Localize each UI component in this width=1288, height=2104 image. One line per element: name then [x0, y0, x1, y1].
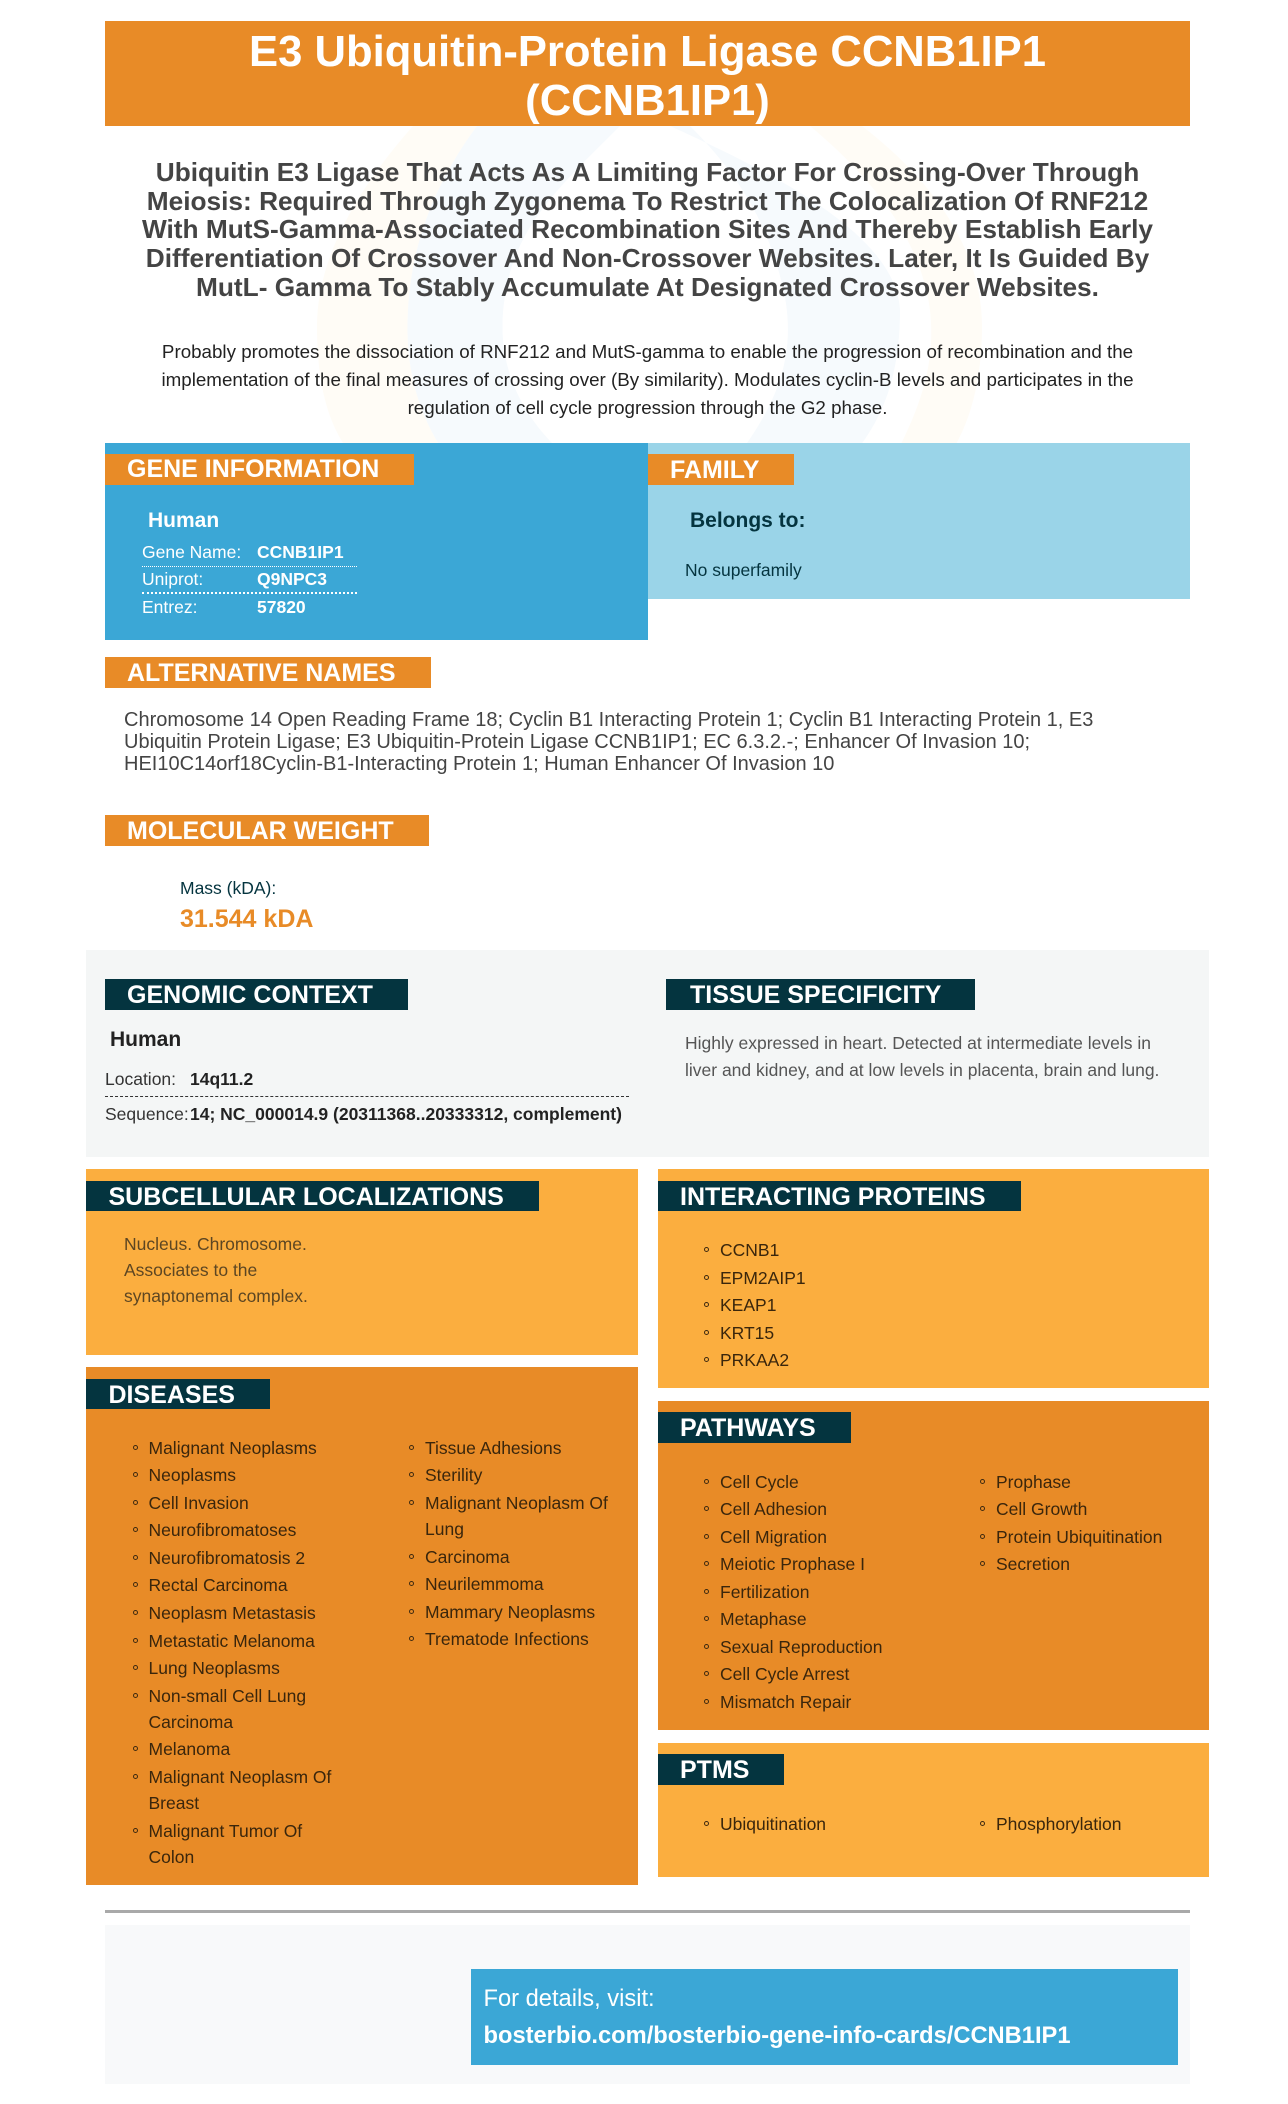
pathway list column 1: Fertilization — [720, 1582, 809, 1602]
disease list column 2: Malignant Neoplasm Of — [425, 1493, 608, 1513]
interacting protein list: KRT15 — [720, 1323, 774, 1343]
disease list column 2: Carcinoma — [425, 1547, 510, 1567]
sequence row: 14; NC_000014.9 (20311368..20333312, complement) — [190, 1104, 622, 1124]
panel: interacting proteins — [658, 1169, 1209, 1388]
panel: subcellular localizations — [86, 1169, 638, 1355]
pathway list column 1: Cell Migration — [720, 1527, 827, 1547]
disease list column 1: Metastatic Melanoma — [148, 1631, 315, 1651]
pathway list column 2: Prophase — [996, 1472, 1071, 1492]
panel: family — [648, 443, 1190, 599]
pathway list column 2: Secretion — [996, 1554, 1070, 1574]
ptm item: phosphorylation: Phosphorylation — [996, 1814, 1122, 1834]
heading: ptms — [658, 1754, 784, 1785]
subtitle heading: With MutS-Gamma-Associated Recombination Sites And Thereby Establish Early — [142, 214, 1153, 244]
title banner: (CCNB1IP1) — [525, 77, 770, 125]
heading: pathways — [658, 1412, 851, 1443]
alternative names text: HEI10C14orf18Cyclin-B1-Interacting Protein 1; Human Enhancer Of Invasion 10 — [124, 753, 834, 775]
interacting protein list: PRKAA2 — [720, 1350, 789, 1370]
panel: pathways — [658, 1401, 1209, 1730]
uniprot row — [142, 567, 357, 594]
disease list column 2: Mammary Neoplasms — [425, 1602, 595, 1622]
description paragraph: regulation of cell cycle progression through the G2 phase. — [408, 397, 887, 418]
heading: pathways: PATHWAYS — [680, 1414, 816, 1442]
disease list column 2: Tissue Adhesions — [425, 1438, 562, 1458]
disease list column 1: Melanoma — [148, 1739, 230, 1759]
panel: gene information — [105, 443, 648, 640]
location row: 14q11.2 — [190, 1069, 253, 1089]
alternative names text: Ubiquitin Protein Ligase; E3 Ubiquitin-Protein Ligase CCNB1IP1; EC 6.3.2.-; Enhancer Of Invasion 10; — [124, 731, 1030, 753]
location row: Location: — [105, 1069, 176, 1089]
disease list column 2: Lung — [425, 1519, 464, 1539]
title banner — [105, 21, 1190, 126]
title banner: E3 Ubiquitin-Protein Ligase CCNB1IP1 — [249, 28, 1046, 76]
interacting protein list — [704, 1240, 806, 1370]
disease list column 2: Sterility — [425, 1465, 482, 1485]
alternative names text — [124, 709, 1093, 775]
entrez row: 57820 — [257, 597, 306, 617]
disease list column 1: Malignant Tumor Of — [148, 1821, 302, 1841]
disease list column 2 — [409, 1438, 608, 1649]
family value: No superfamily — [685, 560, 802, 580]
call to action box — [471, 1969, 1178, 2065]
localization text — [124, 1234, 308, 1306]
pathway list column 1: Cell Cycle — [720, 1472, 799, 1492]
ptm item: ubiquitination: Ubiquitination — [720, 1814, 826, 1834]
disease list column 1: Rectal Carcinoma — [148, 1575, 288, 1595]
interacting protein list: CCNB1 — [720, 1240, 779, 1260]
disease list column 1: Malignant Neoplasm Of — [148, 1767, 331, 1787]
background logo watermark — [317, 126, 982, 443]
disease list column 1: Neoplasms — [148, 1465, 236, 1485]
subtitle heading: Ubiquitin E3 Ligase That Acts As A Limiting Factor For Crossing-Over Through — [156, 157, 1139, 187]
heading: diseases: DISEASES — [108, 1381, 235, 1409]
subtitle heading: Differentiation Of Crossover And Non-Crossover Websites. Later, It Is Guided By — [146, 243, 1149, 273]
interacting protein list: EPM2AIP1 — [720, 1268, 806, 1288]
pathway list column 1: Sexual Reproduction — [720, 1637, 882, 1657]
localization text: Associates to the — [124, 1260, 257, 1280]
pathway list column 1: Metaphase — [720, 1609, 807, 1629]
tissue specificity text: Highly expressed in heart. Detected at intermediate levels in — [685, 1033, 1151, 1053]
disease list column 2: Neurilemmoma — [425, 1574, 544, 1594]
gene name row: Gene Name: — [142, 542, 241, 562]
mass value: 31.544 kDA — [180, 905, 313, 933]
disease list column 1: Neurofibromatosis 2 — [148, 1548, 305, 1568]
interacting protein list: KEAP1 — [720, 1295, 776, 1315]
entrez row — [142, 597, 306, 617]
localization text: Nucleus. Chromosome. — [124, 1234, 307, 1254]
belongs to label: Belongs to: — [690, 509, 806, 532]
disease list column 1 — [133, 1438, 332, 1867]
pathway list column 2: Cell Growth — [996, 1499, 1087, 1519]
pathway list column 1: Cell Cycle Arrest — [720, 1664, 849, 1684]
description paragraph — [161, 341, 1134, 418]
disease list column 1: Malignant Neoplasms — [148, 1438, 317, 1458]
disease list column 1: Colon — [148, 1847, 194, 1867]
heading: ptms: PTMS — [680, 1756, 749, 1784]
heading: genomic context: GENOMIC CONTEXT — [127, 981, 373, 1009]
uniprot row: Q9NPC3 — [257, 569, 327, 589]
mass label: Mass (kDA): — [180, 878, 276, 898]
heading: interacting proteins: INTERACTING PROTEINS — [680, 1183, 986, 1211]
species label: Human — [148, 509, 219, 532]
pathway list column 2: Protein Ubiquitination — [996, 1527, 1162, 1547]
gene name row: CCNB1IP1 — [257, 542, 344, 562]
heading: molecular weight: MOLECULAR WEIGHT — [127, 817, 394, 845]
heading: gene information: GENE INFORMATION — [127, 455, 379, 483]
disease list column 2: Trematode Infections — [425, 1629, 589, 1649]
uniprot row: Uniprot: — [142, 569, 203, 589]
footer divider — [105, 1910, 1190, 1913]
pathway list column 2 — [980, 1472, 1162, 1574]
disease list column 1: Cell Invasion — [148, 1493, 249, 1513]
description paragraph: Probably promotes the dissociation of RNF212 and MutS-gamma to enable the progression of recombination and the — [162, 341, 1133, 362]
disease list column 1: Carcinoma — [148, 1712, 233, 1732]
panel: diseases — [86, 1367, 638, 1885]
panel: footer — [105, 1925, 1190, 2084]
entrez row: Entrez: — [142, 597, 197, 617]
disease list column 1: Neoplasm Metastasis — [148, 1603, 316, 1623]
panel: genomic context and tissue specificity — [86, 950, 1209, 1157]
pathway list column 1: Mismatch Repair — [720, 1692, 851, 1712]
genomic species label: Human — [110, 1028, 181, 1051]
pathway list column 1: Meiotic Prophase I — [720, 1554, 865, 1574]
pathway list column 1: Cell Adhesion — [720, 1499, 827, 1519]
alternative names text: Chromosome 14 Open Reading Frame 18; Cyclin B1 Interacting Protein 1; Cyclin B1 Interacting Protein 1, E3 — [124, 709, 1093, 731]
subtitle heading: MutL- Gamma To Stably Accumulate At Designated Crossover Websites. — [196, 272, 1099, 302]
pathway list column 1 — [704, 1472, 882, 1712]
disease list column 1: Non-small Cell Lung — [148, 1686, 306, 1706]
disease list column 1: Lung Neoplasms — [148, 1658, 280, 1678]
tissue specificity text: liver and kidney, and at low levels in placenta, brain and lung. — [685, 1060, 1159, 1080]
tissue specificity text — [685, 1033, 1159, 1080]
sequence row: Sequence: — [105, 1104, 189, 1124]
heading: subcellular localizations: SUBCELLULAR LOCALIZATIONS — [108, 1183, 504, 1211]
location row — [105, 1067, 629, 1097]
subtitle heading — [142, 157, 1153, 302]
call to action label: For details, visit: — [484, 1986, 655, 2012]
heading: diseases — [86, 1379, 270, 1409]
gene name row — [142, 540, 357, 567]
subtitle heading: Meiosis: Required Through Zygonema To Restrict The Colocalization Of RNF212 — [147, 186, 1148, 216]
call to action url: bosterbio.com/bosterbio-gene-info-cards/CCNB1IP1 — [484, 2023, 1070, 2049]
heading: family — [648, 454, 794, 485]
heading: alternative names: ALTERNATIVE NAMES — [127, 659, 396, 687]
disease list column 1: Neurofibromatoses — [148, 1520, 296, 1540]
disease list column 1: Breast — [148, 1793, 199, 1813]
localization text: synaptonemal complex. — [124, 1286, 308, 1306]
heading: tissue specificity: TISSUE SPECIFICITY — [690, 981, 941, 1009]
description paragraph: implementation of the final measures of crossing over (By similarity). Modulates cyclin-B levels and participates in the — [161, 369, 1134, 390]
panel: ptms — [658, 1743, 1209, 1877]
heading: family: FAMILY — [670, 456, 759, 484]
